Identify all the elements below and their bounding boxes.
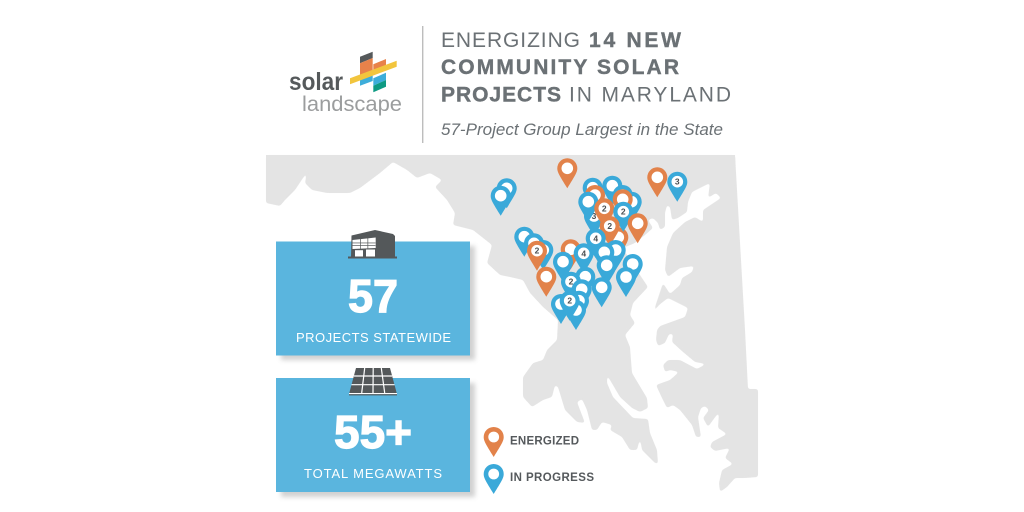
title: COMMUNITY SOLAR [441, 56, 679, 79]
title [441, 29, 731, 106]
map pins: Baltimore cluster: 2 [621, 207, 626, 217]
legend: in progress: IN PROGRESS [510, 472, 594, 484]
map pins: north-east pair [647, 167, 687, 202]
panel: total megawatts [276, 368, 475, 497]
map pins: southern cluster: 2 [567, 296, 572, 306]
map pins: western shore cluster: 4 [581, 248, 586, 258]
map pins: Baltimore cluster: 2 [607, 221, 612, 231]
divider [422, 26, 423, 143]
map pins: Baltimore cluster [578, 176, 648, 257]
map pins: western shore cluster: 2 [535, 246, 540, 256]
map of Maryland [266, 155, 758, 492]
map pin: northern energized [557, 158, 577, 188]
subtitle: 57-Project Group Largest in the State [441, 120, 723, 139]
map pins: central cluster [586, 228, 643, 307]
logo: solar landscape: solar [289, 68, 343, 96]
map pins: central cluster: 4 [593, 233, 598, 243]
legend: energized: ENERGIZED [510, 435, 579, 447]
title: PROJECTS [441, 84, 561, 106]
stat label: TOTAL MEGAWATTS [304, 466, 442, 481]
title: ENERGIZING [441, 29, 580, 52]
map pins: southern cluster: 2 [569, 277, 574, 287]
icon: solar panel [349, 368, 397, 395]
stat label: PROJECTS STATEWIDE [296, 330, 451, 345]
map pins: Baltimore cluster: 3 [592, 211, 597, 221]
stat: 57: 57 [348, 270, 398, 322]
icon: building [348, 230, 397, 258]
logo: solar landscape: landscape [302, 92, 402, 116]
panel: projects statewide [276, 230, 475, 360]
logo: solar landscape [289, 52, 402, 116]
map pins: southern cluster [551, 267, 595, 330]
legend [484, 427, 594, 494]
map pins: north-east pair: 3 [675, 177, 680, 187]
stat: 55+: 55+ [334, 406, 412, 458]
map pins: western pair [491, 178, 517, 216]
map pins: western shore cluster [514, 227, 594, 297]
map pins: Baltimore cluster: 2 [602, 203, 607, 213]
title: IN MARYLAND [569, 84, 731, 106]
title: 14 NEW [589, 29, 681, 52]
